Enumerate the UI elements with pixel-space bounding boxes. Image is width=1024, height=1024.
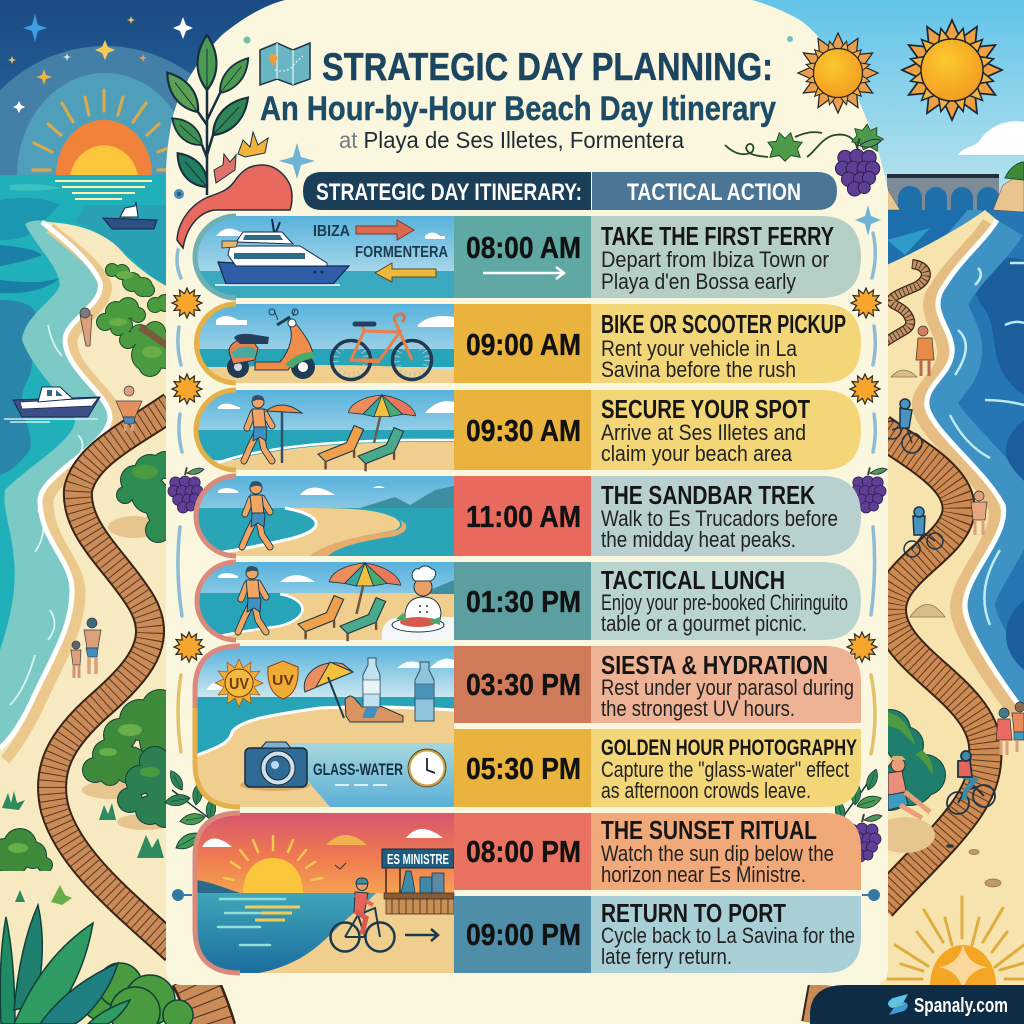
- action: tactical lunch: table or a gourmet picnic.: [601, 611, 807, 636]
- action: return to port: RETURN TO PORT: [601, 898, 786, 928]
- action: return to port: [591, 896, 861, 973]
- icon: brand logo: [888, 994, 908, 1015]
- row 4: the sandbar trek: [190, 476, 861, 556]
- time: 08:00 AM: [454, 216, 591, 298]
- icon: water bottle tall: [415, 662, 434, 721]
- icon: UV sun: [215, 659, 263, 707]
- icon: setting sun: [0, 46, 250, 175]
- action: bike or scooter: Rent your vehicle in La: [601, 336, 798, 361]
- action: bike or scooter: [591, 304, 861, 383]
- time: 11:00 AM: 11:00 AM: [466, 499, 581, 534]
- label: Es Ministre stall: ES MINISTRE: [387, 851, 449, 868]
- action: secure your spot: SECURE YOUR SPOT: [601, 394, 810, 424]
- action: golden hour photography: as afternoon crowds leave.: [601, 778, 811, 803]
- arrow: to Ibiza: [375, 263, 436, 282]
- action: return to port: Cycle back to La Savina for the: [601, 923, 855, 948]
- title: [260, 46, 776, 153]
- action: sandbar trek: THE SANDBAR TREK: [601, 480, 815, 510]
- time: 11:00 AM: [454, 476, 591, 556]
- time: 05:30 PM: [454, 729, 591, 807]
- figures on right beach: [916, 326, 1024, 755]
- icon: sun in title: [798, 33, 878, 113]
- label: Ibiza: IBIZA: [313, 223, 350, 240]
- illustration: UV, hydration and camera: [190, 646, 454, 807]
- action: sandbar trek: Walk to Es Trucadors before: [601, 506, 838, 531]
- brand footer: [810, 985, 1024, 1024]
- row 2: bike or scooter pickup: [190, 304, 861, 383]
- cyclist mid right: [904, 507, 943, 557]
- action: return to port: late ferry return.: [601, 944, 732, 969]
- arrow: to Formentera: [356, 220, 414, 240]
- left boardwalk: [52, 406, 214, 1024]
- time: 09:00 PM: 09:00 PM: [466, 917, 581, 952]
- time: 08:00 PM: 08:00 PM: [466, 834, 581, 869]
- header: tactical action: TACTICAL ACTION: [627, 179, 801, 206]
- rows 6 and 7: siesta and golden hour: [190, 646, 861, 807]
- illustration: walking on sandbar: [190, 476, 454, 556]
- time: 08:00 AM: 08:00 AM: [466, 230, 581, 265]
- time: 09:00 AM: [454, 304, 591, 383]
- action: siesta and hydration: the strongest UV hours.: [601, 696, 795, 721]
- icon: distant boat: [103, 202, 157, 229]
- time: 09:30 AM: 09:30 AM: [466, 413, 581, 448]
- illustration: scooter and bike: [190, 304, 454, 383]
- bushes: [0, 263, 191, 877]
- time: 09:00 AM: 09:00 AM: [466, 327, 581, 362]
- action: sunset ritual: [591, 813, 861, 890]
- action: ferry: Playa d'en Bossa early: [601, 269, 796, 294]
- right bushes and sitting woman: [869, 709, 946, 853]
- icon: UV sun: UV: [229, 676, 249, 693]
- action: sunset ritual: horizon near Es Ministre.: [601, 862, 806, 887]
- icon: stars: [8, 14, 193, 113]
- icon: folded map: [260, 43, 310, 85]
- time: 05:30 PM: 05:30 PM: [466, 751, 581, 786]
- arrow: ride onward: [405, 929, 438, 941]
- time: 01:30 PM: 01:30 PM: [466, 584, 581, 619]
- left beach: [0, 222, 170, 1024]
- row 3: secure your spot: [190, 390, 861, 471]
- label: Es Ministre stall: [382, 849, 454, 914]
- label: Formentera: FORMENTERA: [355, 244, 448, 261]
- action: secure your spot: Arrive at Ses Illetes and: [601, 420, 806, 445]
- time: 03:30 PM: 03:30 PM: [466, 667, 581, 702]
- action: tactical lunch: [591, 562, 861, 640]
- header bar: [303, 172, 837, 210]
- time: 09:30 AM: [454, 390, 591, 470]
- cyclist upper right: [883, 399, 922, 453]
- sand mounds and stones: [891, 370, 1001, 887]
- illustration: lunch with chef: [190, 562, 454, 641]
- row 1: take the first ferry: [190, 216, 861, 298]
- title: STRATEGIC DAY PLANNING:: [322, 46, 773, 89]
- action: bike or scooter: BIKE OR SCOOTER PICKUP: [601, 309, 846, 339]
- right boardwalk: [818, 430, 985, 1024]
- action: siesta and hydration: Rest under your parasol during: [601, 675, 854, 700]
- icon: camera: [245, 742, 307, 787]
- icon: parasol with sunbather: [304, 662, 403, 722]
- left vine and coral heart decoration: [160, 35, 793, 248]
- rows 8 and 9: sunset ritual and return to port: [190, 813, 861, 973]
- illustration: sunset, stall and cyclist: [190, 813, 454, 973]
- right background scene: [730, 0, 1024, 1024]
- icon: stone bridge: [887, 162, 1024, 212]
- left sea: [0, 175, 170, 765]
- figures on left beach: [71, 308, 142, 678]
- action: secure your spot: claim your beach area: [601, 441, 793, 466]
- action: golden hour photography: [591, 729, 861, 807]
- bottom-right sun: [887, 897, 1024, 990]
- action: golden hour photography: GOLDEN HOUR PHOTOGRAPHY: [601, 735, 857, 760]
- action: siesta and hydration: SIESTA & HYDRATION: [601, 650, 828, 680]
- illustration: ferry crossing: [190, 216, 454, 298]
- icon: vine with grapes: [725, 121, 886, 196]
- icon: cyclist: [330, 878, 394, 952]
- action: ferry: [591, 216, 861, 298]
- time: 09:00 PM: [454, 896, 591, 973]
- right sea: [880, 205, 1024, 715]
- time: 08:00 PM: [454, 813, 591, 890]
- icon: right sprig with grapes: [833, 767, 883, 862]
- left background scene: [0, 0, 300, 1024]
- time: 03:30 PM: [454, 646, 591, 723]
- action: sandbar trek: the midday heat peaks.: [601, 527, 796, 552]
- cyclist on right boardwalk: [947, 751, 995, 814]
- time: 01:30 PM: [454, 562, 591, 640]
- header bar: STRATEGIC DAY ITINERARY:: [316, 179, 582, 206]
- header: tactical action: [592, 172, 837, 210]
- action: tactical lunch: Enjoy your pre-booked Chiringuito: [601, 590, 848, 615]
- icon: clock: [408, 749, 446, 787]
- icon: UV shield: [268, 661, 298, 699]
- row 5: tactical lunch: [190, 562, 861, 641]
- action: siesta and hydration: [591, 646, 861, 723]
- action: sandbar trek: [591, 476, 861, 556]
- icon: water bottle: [363, 658, 380, 707]
- action: ferry: Depart from Ibiza Town or: [601, 247, 829, 272]
- action: golden hour photography: Capture the "glass-water" effect: [601, 757, 849, 782]
- icon: cloud: [958, 121, 1024, 155]
- side ornaments: [164, 205, 887, 900]
- location line: at Playa de Ses Illetes, Formentera: [339, 127, 684, 153]
- icon: motor boat: [4, 387, 100, 422]
- icon: left olive sprig: [164, 768, 217, 853]
- illustration: parasol and loungers: [190, 390, 454, 471]
- subtitle: An Hour-by-Hour Beach Day Itinerary: [260, 90, 776, 128]
- action: secure your spot: [591, 390, 861, 470]
- action: bike or scooter: Savina before the rush: [601, 357, 796, 382]
- right small boardwalk: [885, 264, 926, 342]
- action: sunset ritual: Watch the sun dip below the: [601, 841, 834, 866]
- action: tactical lunch: TACTICAL LUNCH: [601, 565, 785, 595]
- icon: grass tufts: [2, 791, 164, 905]
- foliage: bottom-left palm and bush: [0, 905, 193, 1024]
- icon: large sun: [899, 17, 1005, 123]
- action: sunset ritual: THE SUNSET RITUAL: [601, 815, 817, 845]
- panel: itinerary card: [166, 0, 888, 985]
- action: ferry: TAKE THE FIRST FERRY: [601, 221, 834, 251]
- right beach: [880, 210, 1024, 1024]
- label: glass-water: GLASS-WATER: [313, 760, 403, 779]
- icon: UV shield: UV: [272, 672, 294, 689]
